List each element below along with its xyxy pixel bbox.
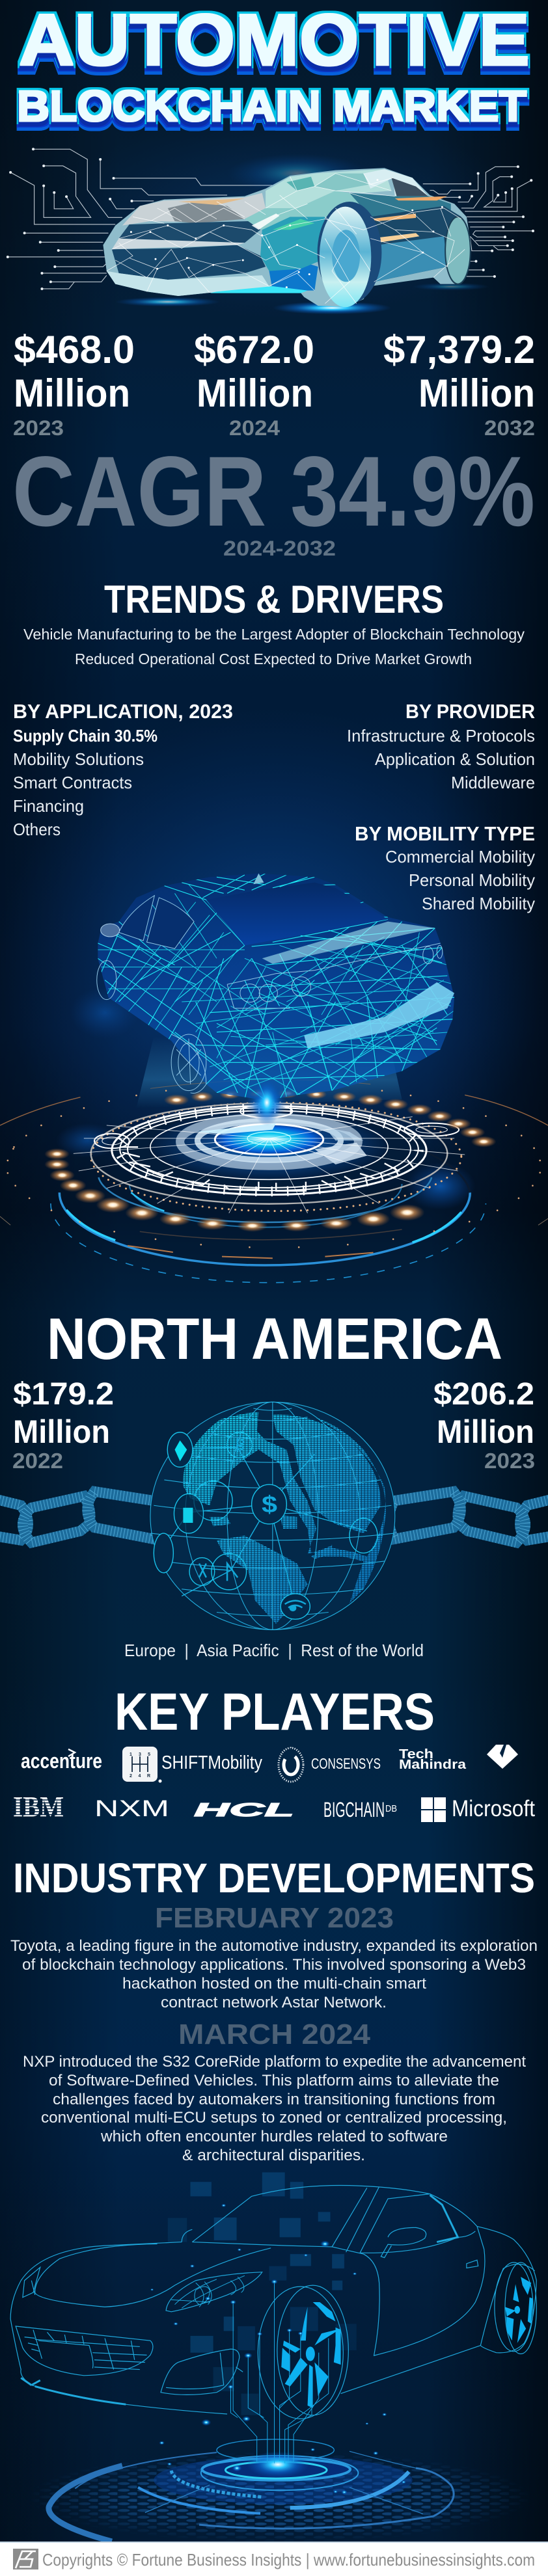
logo: Shift Mobility (122, 1747, 262, 1782)
bottom car illustration (0, 2172, 548, 2543)
stat: North America 2022: Million (13, 1414, 110, 1450)
development text: NXP: of Software-Defined Vehicles. This platform aims to alleviate the (49, 2072, 499, 2089)
heading: key players: KEY PLAYERS (115, 1683, 435, 1741)
development text: Toyota (10, 1937, 538, 2011)
light beams (136, 1036, 402, 1108)
stat: 2024 market size: 2024 (229, 416, 280, 440)
wireframe car, rear view (97, 874, 454, 1101)
car body (103, 168, 470, 307)
car outline (10, 2185, 536, 2414)
segment: by mobility type: Shared Mobility (422, 894, 535, 913)
circuit traces (8, 149, 533, 289)
development text: NXP: challenges faced by automakers in transitioning functions from (53, 2091, 495, 2108)
stat: 2032 market size: 2032 (484, 416, 535, 440)
driver 1: Vehicle Manufacturing to be the Largest Adopter of Blockchain Technology (23, 626, 525, 643)
segment: by mobility type: Commercial Mobility (385, 847, 535, 866)
segment: by provider: Application & Solution (375, 749, 535, 769)
logo: Tech Mahindra: Mahindra (399, 1758, 467, 1772)
development text: Toyota: of blockchain technology applications. This involved sponsoring a Web3 (22, 1956, 526, 1974)
dollar icon: $ (262, 1491, 277, 1518)
segment: by application: BY APPLICATION, 2023 (13, 700, 233, 723)
globe disc (150, 1402, 395, 1630)
outer rings (0, 1080, 548, 1283)
rear wheel (495, 2262, 536, 2354)
platform glow (247, 2451, 309, 2478)
hologram platform (0, 987, 548, 1283)
logo: HCL: HCL (194, 1800, 294, 1821)
logo: Microsoft (421, 1796, 535, 1822)
logo: IBM: IBM (13, 1791, 64, 1823)
stat: 2032 market size: Million (418, 371, 535, 415)
logo: NXM: NXM (94, 1796, 169, 1821)
stat: 2024 market size: $672.0 (194, 328, 314, 371)
antenna (253, 874, 264, 884)
development text: Toyota: Toyota, a leading figure in the automotive industry, expanded its exploration (10, 1937, 538, 1955)
main disc (91, 1103, 447, 1204)
footer (0, 2542, 548, 2576)
date: February 2023: FEBRUARY 2023 (155, 1902, 394, 1934)
logo: diamond mark (487, 1745, 518, 1769)
floor dots (42, 2455, 518, 2540)
logo: Shift Mobility: 1 3 5 (130, 1752, 150, 1757)
side mirror (101, 924, 120, 937)
segment: by application: Financing (13, 796, 84, 816)
stat: North America 2023: Million (437, 1414, 534, 1450)
stat: 2032 market size (383, 328, 535, 440)
segment: by mobility type: BY MOBILITY TYPE (355, 822, 535, 845)
development text: NXP: which often encounter hurdles related to software (100, 2128, 448, 2145)
title line 1: AUTOMOTIVE (19, 0, 530, 81)
trunk lip highlight (262, 922, 435, 964)
stat: North America 2023: 2023 (484, 1449, 535, 1473)
dotted continents (184, 1412, 386, 1624)
side windows and wheel outlines (119, 896, 194, 948)
heading: north america: NORTH AMERICA (47, 1307, 502, 1372)
sparkles (150, 2204, 406, 2494)
stat: 2023 market size: $468.0 (14, 328, 135, 371)
logo: BigchainDB: DB (385, 1803, 397, 1814)
logo: Shift Mobility: SHIFTMobility (161, 1752, 262, 1773)
circuit nodes (8, 149, 533, 289)
CAGR period: 2024-2032 (223, 537, 336, 560)
segment: by application: Smart Contracts (13, 773, 132, 792)
development text: NXP: & architectural disparities. (182, 2147, 365, 2164)
stat: 2024 market size: Million (197, 371, 313, 415)
segment: by application: Supply Chain 30.5% (13, 726, 158, 745)
development text: Toyota: contract network Astar Network. (161, 1994, 387, 2011)
segment: by provider (347, 700, 535, 792)
other regions: Europe | Asia Pacific | Rest of the World (124, 1641, 424, 1660)
radial lines (74, 1117, 465, 1213)
satellite rings (94, 1105, 459, 1148)
wireframe mesh (107, 174, 465, 304)
footer logo (13, 2549, 38, 2569)
segment: by provider: Infrastructure & Protocols (347, 726, 535, 745)
stat: North America 2022: $179.2 (13, 1377, 114, 1412)
development text: NXP (23, 2053, 526, 2164)
car body fill (98, 874, 454, 1101)
logo: Microsoft: Microsoft (452, 1796, 535, 1821)
rear wheel (445, 217, 471, 284)
development text: Toyota: hackathon hosted on the multi-chain smart (122, 1975, 426, 1992)
development text: NXP: conventional multi-ECU setups to zoned or centralized processing, (41, 2109, 507, 2127)
hero illustration: low-poly car with circuit traces (8, 149, 533, 314)
stat: 2023 market size: 2023 (13, 416, 64, 440)
stat: 2023 market size (13, 328, 135, 440)
circuit traces (230, 2282, 329, 2463)
segment: by provider: BY PROVIDER (405, 700, 535, 723)
logo: Accenture: accenture (21, 1749, 102, 1773)
logo: BigchainDB: BIGCHAIN (323, 1798, 385, 1821)
segment: by application (13, 700, 233, 839)
globe grid (150, 1402, 395, 1630)
mesh (98, 874, 454, 1101)
segment: by application: Others (13, 820, 61, 839)
mesh nodes (131, 180, 442, 288)
segment: by provider: Middleware (451, 773, 535, 792)
right chain (389, 1492, 548, 1542)
stat: North America 2023 (433, 1377, 535, 1473)
stat: 2023 market size: Million (14, 371, 130, 415)
front wheel (318, 202, 381, 307)
segment: by mobility type: Personal Mobility (409, 870, 535, 890)
logo: Consensys: CONSENSYS (311, 1755, 381, 1772)
left chain (0, 1492, 159, 1542)
logo: Consensys (279, 1748, 381, 1782)
scattered lights (8, 1091, 540, 1247)
logo: Tech Mahindra (399, 1747, 467, 1772)
globe and chain illustration (0, 1394, 548, 1638)
stat: North America 2022 (12, 1377, 114, 1473)
rear window (206, 883, 388, 945)
bumper highlight (304, 982, 454, 1049)
stat: North America 2023: $206.2 (433, 1377, 534, 1412)
lower ring segments (120, 1147, 398, 1191)
development text: NXP: NXP introduced the S32 CoreRide platform to expedite the advancement (23, 2053, 526, 2071)
segment: by application: Mobility Solutions (13, 749, 144, 769)
driver 2: Reduced Operational Cost Expected to Drive Market Growth (75, 651, 472, 667)
logo: Shift Mobility: 2 4 R (130, 1774, 150, 1778)
orange lights (44, 1089, 497, 1232)
stat: 2032 market size: $7,379.2 (383, 328, 535, 371)
logo: Tech Mahindra: Tech (399, 1747, 433, 1762)
network links (161, 1447, 367, 1607)
front wheel (258, 2285, 348, 2419)
stat: 2024 market size (194, 328, 314, 440)
segment: by mobility type (355, 822, 535, 913)
date: March 2024: MARCH 2024 (178, 2019, 371, 2050)
title line 2: BLOCKCHAIN MARKET (17, 82, 527, 131)
platform rings (49, 2439, 454, 2542)
stat: North America 2022: 2022 (12, 1449, 63, 1473)
blockchain node icons (154, 1432, 377, 1619)
heading: trends and drivers: TRENDS & DRIVERS (104, 578, 444, 621)
title (17, 0, 530, 131)
data mosaic (168, 2172, 357, 2415)
